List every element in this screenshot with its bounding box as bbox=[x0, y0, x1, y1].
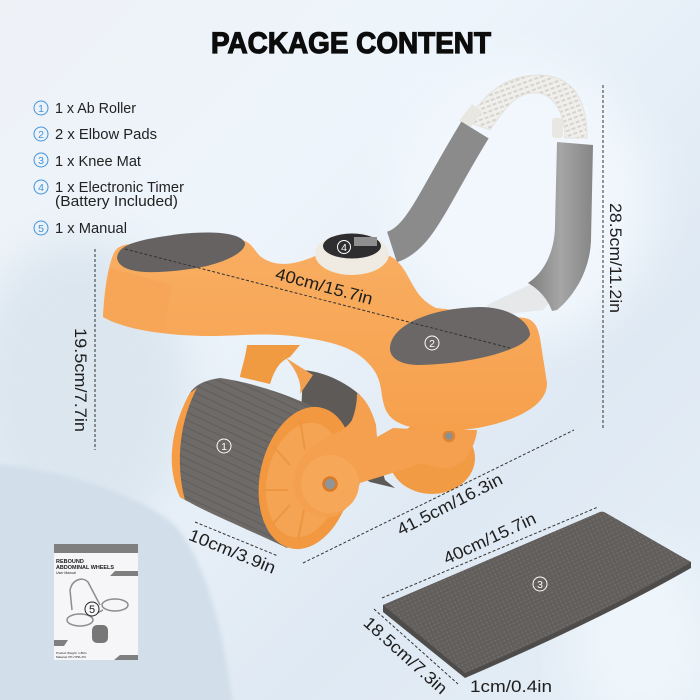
body end shading bbox=[103, 268, 172, 333]
orange body bbox=[103, 240, 547, 431]
manual label: 5 bbox=[89, 604, 95, 616]
dimension: mat width: 18.5cm/7.3in bbox=[360, 613, 451, 698]
user manual: Product Weight: 1.8KG bbox=[56, 651, 87, 655]
item 5: 1 x Manual bbox=[55, 220, 127, 237]
user manual: User Manual bbox=[56, 571, 76, 575]
user manual bbox=[54, 544, 138, 660]
handle: right foam sleeve bbox=[528, 142, 593, 311]
item 1: 1 bbox=[38, 103, 44, 115]
roller back supports bbox=[240, 345, 313, 394]
item 4: (Battery Included) bbox=[55, 193, 178, 210]
wheel hub face bbox=[246, 398, 366, 558]
rear wheel bbox=[300, 370, 475, 494]
dimension: body width bbox=[125, 249, 510, 348]
right elbow pad: 2 bbox=[429, 338, 435, 350]
wheel arm with bolt bbox=[294, 393, 477, 518]
knee mat: 3 bbox=[537, 579, 543, 591]
right elbow pad bbox=[390, 307, 530, 365]
rear bolt bbox=[444, 431, 454, 441]
knee mat bbox=[383, 512, 691, 678]
user manual: REBOUND bbox=[56, 559, 84, 565]
dimension: body width: 40cm/15.7in bbox=[273, 264, 375, 309]
dimension: mat thickness: 1cm/0.4in bbox=[470, 677, 552, 696]
user manual: ABDOMINAL WHEELS bbox=[56, 565, 114, 571]
dimension: wheel width: 10cm/3.9in bbox=[186, 525, 278, 578]
dimension: mat length bbox=[382, 507, 598, 598]
dimension: roller height: 19.5cm/7.7in bbox=[71, 328, 90, 432]
title: PACKAGE CONTENT bbox=[211, 27, 491, 60]
handle: steel bar bbox=[487, 283, 552, 316]
item 3: 3 bbox=[38, 155, 44, 167]
handle: left foam sleeve bbox=[392, 130, 475, 247]
dimension: mat length: 40cm/15.7in bbox=[440, 509, 539, 568]
manual illustration bbox=[67, 579, 128, 626]
front wheel bbox=[172, 378, 366, 558]
item 1: 1 x Ab Roller bbox=[55, 100, 136, 117]
wheel tread bbox=[173, 378, 330, 548]
electronic timer bbox=[315, 233, 389, 275]
contents list bbox=[34, 100, 184, 237]
front bolt bbox=[324, 478, 336, 490]
user manual: Material: PP+TPR+PU bbox=[56, 655, 86, 659]
item 5: 5 bbox=[38, 223, 44, 235]
electronic timer: 4 bbox=[341, 242, 347, 254]
wheel label bbox=[217, 439, 231, 453]
left elbow pad bbox=[117, 233, 245, 272]
dimension: roller length bbox=[303, 430, 574, 563]
item 2: 2 x Elbow Pads bbox=[55, 126, 157, 143]
item 2: 2 bbox=[38, 129, 44, 141]
ab roller bbox=[103, 75, 593, 558]
handle: white grip bbox=[459, 75, 587, 138]
dimension: height: 28.5cm/11.2in bbox=[606, 203, 625, 313]
item 3: 1 x Knee Mat bbox=[55, 153, 142, 170]
wheel label: 1 bbox=[221, 441, 227, 453]
dimension: roller length: 41.5cm/16.3in bbox=[394, 470, 506, 539]
item 4 bbox=[34, 179, 184, 210]
item 4: 1 x Electronic Timer bbox=[55, 179, 184, 196]
item 4: 4 bbox=[38, 182, 44, 194]
